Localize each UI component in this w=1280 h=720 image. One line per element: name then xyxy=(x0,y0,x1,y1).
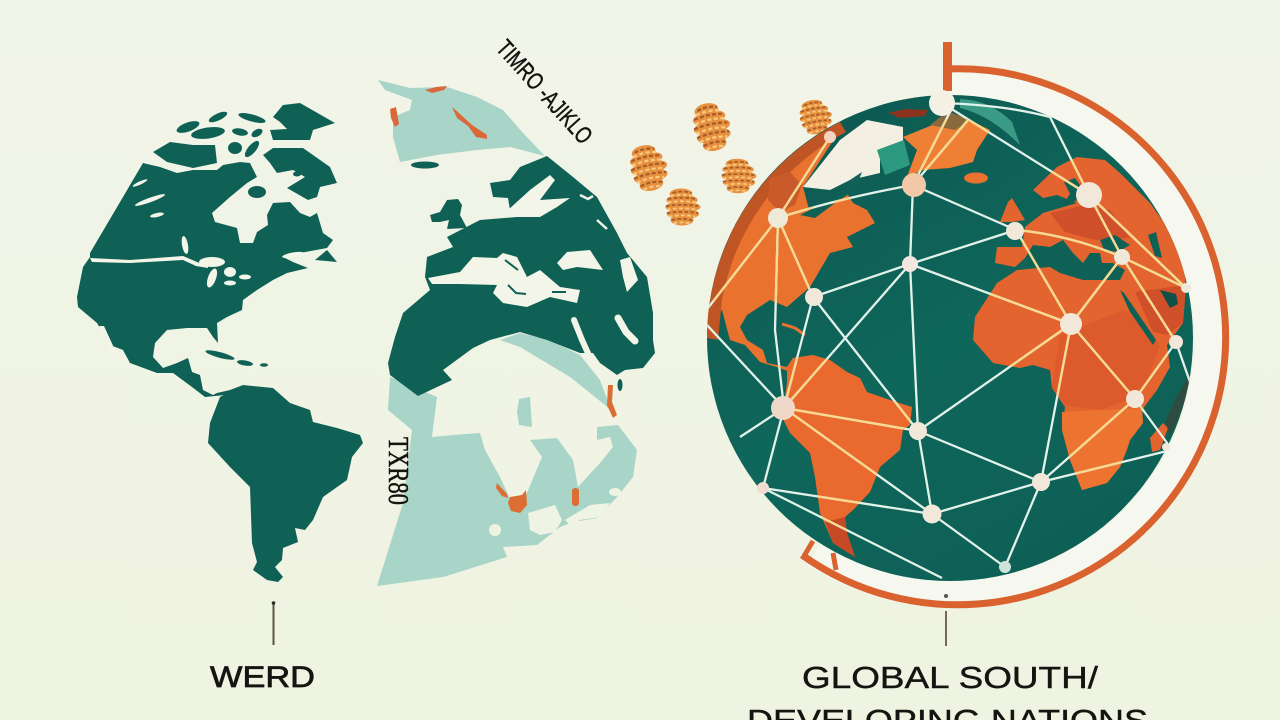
Baltic xyxy=(1064,178,1080,202)
Arctic islands xyxy=(153,103,337,367)
Arabia shade xyxy=(1135,285,1186,335)
globe ring and stand xyxy=(802,42,1226,605)
Italy and Mediterranean marks xyxy=(505,260,566,294)
Alaska shading xyxy=(768,172,802,212)
rotated caption: side: TXR80 xyxy=(382,437,414,505)
ocean disc xyxy=(707,95,1193,581)
Eurasia green landmass xyxy=(388,156,655,396)
central Africa shade xyxy=(1052,310,1160,410)
Canada-US border and lakes xyxy=(90,178,304,356)
left brown limb xyxy=(707,122,846,340)
Patagonia shading xyxy=(825,517,855,557)
Madagascar xyxy=(1150,423,1168,452)
pellet 2 xyxy=(689,99,735,154)
map: Americas in green xyxy=(77,103,363,582)
pale northern coast strip xyxy=(500,333,612,412)
southern Africa lighter xyxy=(1062,408,1143,490)
rotated caption: top: TIMRO -AJIKLO xyxy=(491,35,598,150)
Persian dark mark xyxy=(1160,290,1178,308)
pellet 1 xyxy=(626,141,672,194)
Caspian xyxy=(1148,232,1162,258)
British Isles xyxy=(430,199,467,229)
bottom bracket xyxy=(804,541,836,570)
orange arc xyxy=(802,69,1226,605)
UK xyxy=(1000,198,1025,222)
small northern lakes xyxy=(580,195,607,229)
pellet 4 xyxy=(721,159,757,193)
Greenland pale shape xyxy=(378,80,545,162)
Greenland hub xyxy=(902,173,926,197)
Red Sea xyxy=(1120,290,1156,345)
network lines over land xyxy=(712,116,1184,532)
pellet 3 xyxy=(665,189,701,225)
small green island xyxy=(618,379,622,391)
South America xyxy=(782,355,912,557)
white islands on pale ocean xyxy=(489,488,621,536)
label: WERD: WERD xyxy=(210,661,315,694)
network globe xyxy=(705,90,1193,581)
pale inland lake xyxy=(517,397,532,427)
Greenland top shade xyxy=(930,112,969,130)
top upright xyxy=(943,42,952,91)
Black Sea xyxy=(557,250,603,270)
Red Sea and Gulf xyxy=(574,318,635,362)
pellet 5 xyxy=(797,97,835,137)
map: Eurasia half-globe xyxy=(377,80,655,586)
Baltic Sea xyxy=(508,175,570,217)
pellets cluster xyxy=(626,97,835,225)
stem under globe xyxy=(945,611,947,646)
Mediterranean xyxy=(1025,240,1125,280)
top dark red marks xyxy=(888,109,928,118)
South America landmass xyxy=(208,385,363,582)
Iceland xyxy=(964,172,988,184)
label: Global South / Developing Nations: GLOBAL SOUTH/ xyxy=(802,660,1098,695)
North America xyxy=(705,130,875,372)
top-left dark edge xyxy=(838,106,930,130)
Iceland xyxy=(411,162,439,168)
label: Global South / Developing Nations xyxy=(747,660,1148,720)
east limb shadow xyxy=(1165,370,1192,436)
Cuba xyxy=(782,324,805,335)
small dot xyxy=(944,594,948,598)
Arctic teal patch xyxy=(877,140,910,175)
Arctic green xyxy=(800,172,862,218)
Greenland xyxy=(903,115,990,177)
top right light teal glint xyxy=(960,99,1020,145)
stem under Americas xyxy=(272,601,275,645)
lower pale ocean xyxy=(377,377,637,586)
Europe dark interior xyxy=(1050,205,1130,240)
network lines over ocean xyxy=(707,103,1190,578)
orange coast marks xyxy=(496,385,617,513)
Eurasia and Africa xyxy=(973,157,1186,490)
Caspian Sea xyxy=(620,257,638,292)
network nodes xyxy=(757,90,1191,573)
North America landmass xyxy=(77,162,333,397)
white inner band xyxy=(815,84,1208,594)
Mediterranean Sea xyxy=(428,253,580,307)
top hub xyxy=(929,90,955,116)
Arctic white area xyxy=(803,120,903,190)
orange marks on Greenland xyxy=(390,86,487,139)
Black Sea xyxy=(1100,235,1130,252)
